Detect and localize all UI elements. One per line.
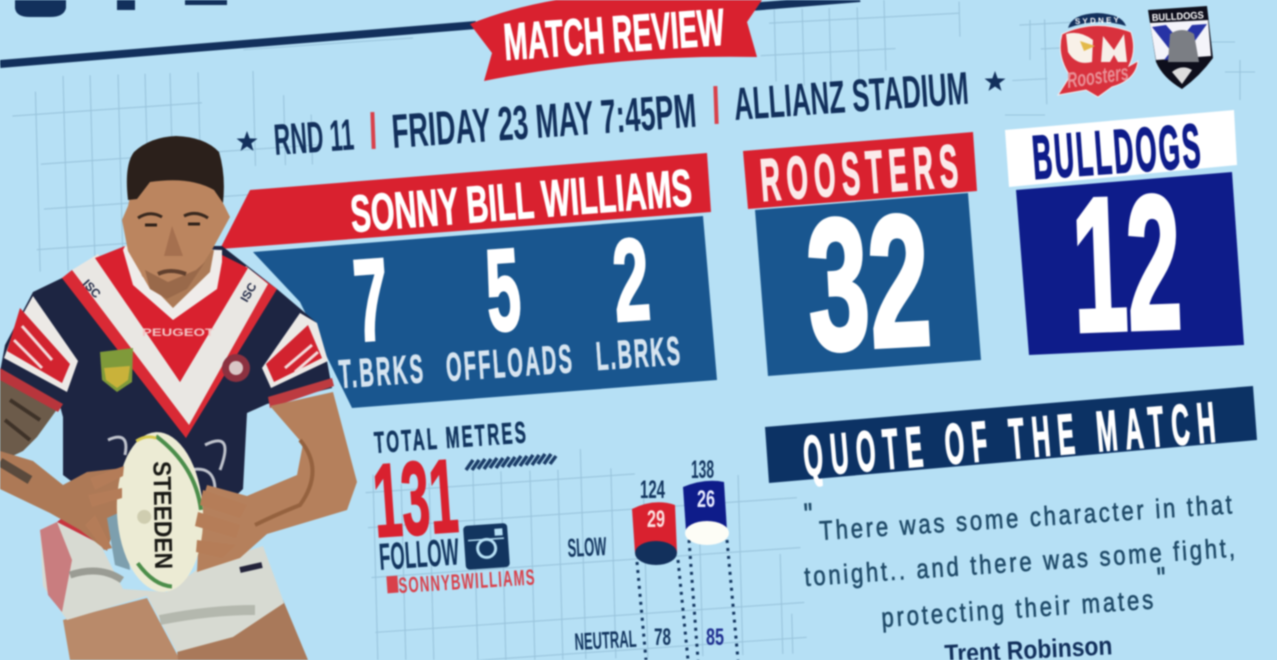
panel: quote of the match: QUOTE OF THE MATCH — [801, 391, 1218, 489]
bulldogs cylinder: 138 — [691, 456, 714, 484]
icon: star left — [237, 131, 257, 151]
panel: sonny bill williams stats — [220, 153, 717, 408]
icon: bulldogs badge — [1148, 6, 1213, 89]
stat: offloads: 5 — [482, 224, 525, 356]
stat: line breaks: L.BRKS — [594, 328, 681, 379]
match review ribbon — [470, 0, 762, 81]
roosters cylinder: 29 — [647, 506, 665, 533]
hair — [127, 136, 224, 203]
player name ribbon — [220, 153, 711, 249]
instagram follow: SONNYBWILLIAMS — [398, 565, 535, 598]
quote text: " — [802, 497, 814, 531]
face — [122, 170, 230, 299]
fixture details — [237, 62, 1005, 165]
roosters cylinder: 124 — [640, 476, 665, 504]
icon: instagram — [463, 523, 510, 570]
jersey body — [0, 246, 332, 530]
instagram follow: FOLLOW — [378, 531, 460, 579]
jersey crests and print — [100, 348, 133, 392]
stat: tackle breaks: T.BRKS — [337, 346, 424, 397]
eyes, nose and mouth — [138, 213, 208, 218]
roosters cylinder — [632, 476, 677, 565]
bulldogs cylinder: 26 — [697, 486, 715, 513]
chart: speed of play cylinders: 78 — [654, 624, 671, 651]
header rule — [0, 0, 860, 64]
icon: bulldogs badge: BULLDOGS — [1152, 10, 1204, 24]
right arm — [197, 392, 357, 572]
hatched accent bar — [466, 454, 556, 470]
stat: line breaks: 2 — [609, 214, 654, 346]
rugby ball — [113, 430, 207, 594]
stat: offloads: OFFLOADS — [444, 336, 573, 390]
instagram follow — [378, 523, 535, 598]
player illustration: ISC — [80, 277, 104, 301]
bulldogs cylinder — [683, 456, 729, 545]
date: FRIDAY 23 MAY 7:45PM — [390, 85, 698, 159]
player illustration — [0, 136, 357, 660]
panel: roosters score: ROOSTERS — [758, 132, 960, 214]
venue: ALLIANZ STADIUM — [732, 62, 970, 130]
stat: offloads — [444, 224, 573, 390]
jersey chevron — [62, 258, 277, 438]
legs — [63, 598, 180, 660]
shorts — [40, 522, 284, 652]
player illustration: PEUGEOT — [142, 327, 214, 339]
left upper arm with tattoo — [0, 378, 58, 462]
stat: tackle breaks — [337, 234, 424, 397]
stat: tackle breaks: 7 — [350, 234, 393, 366]
chart: speed of play cylinders — [567, 456, 738, 660]
dotted guides — [637, 540, 738, 660]
player illustration: ISC — [237, 280, 260, 304]
right sleeve — [262, 313, 328, 388]
slow label: SLOW — [567, 531, 607, 563]
panel: bulldogs score — [1005, 110, 1244, 372]
neutral row: NEUTRAL — [574, 626, 637, 656]
ball shadow — [107, 510, 130, 570]
icon: roosters badge: Roosters — [1065, 60, 1130, 93]
player name ribbon: SONNY BILL WILLIAMS — [348, 159, 694, 244]
fingers — [85, 466, 124, 550]
left sleeve — [4, 296, 78, 392]
title fragments cropped at top edge — [15, 0, 227, 17]
round: RND 11 — [272, 111, 356, 165]
total metres stat: 131 — [370, 438, 461, 560]
total metres stat: TOTAL METRES — [373, 416, 527, 460]
panel: roosters score — [743, 132, 981, 390]
quote text: protecting their mates — [880, 586, 1154, 634]
quote text: There was some character in that — [819, 490, 1233, 547]
panel: bulldogs score: BULLDOGS — [1030, 112, 1203, 193]
icon: roosters badge: SYDNEY — [1075, 15, 1120, 26]
left forearm — [0, 451, 123, 551]
chart: speed of play cylinders: 85 — [706, 624, 724, 651]
stat: line breaks — [594, 214, 681, 379]
icon: roosters badge — [1058, 13, 1138, 97]
quote text: " — [1155, 561, 1167, 595]
rugby ball: STEEDEN — [147, 461, 177, 569]
panel: roosters score: 32 — [802, 177, 935, 390]
quote text — [802, 490, 1236, 660]
quote text: tonight.. and there was some fight, — [803, 534, 1236, 593]
icon: star right — [985, 71, 1005, 91]
collar — [123, 246, 222, 320]
